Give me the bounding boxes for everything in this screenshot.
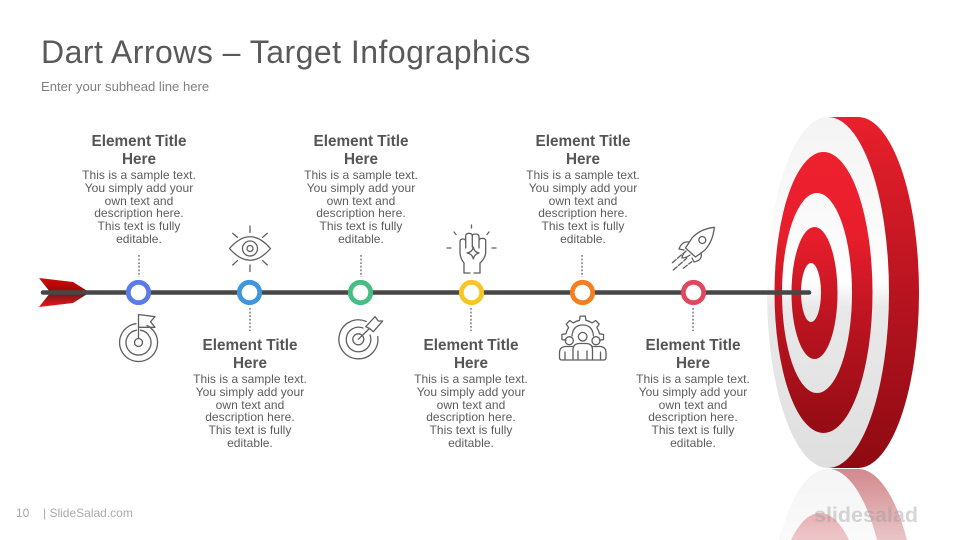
text block 4: Here	[454, 355, 488, 372]
text block 1: This is a sample text.	[82, 168, 196, 182]
footer brand: | SlideSalad.com	[43, 506, 133, 520]
text block 1: Element Title	[92, 133, 186, 150]
text block 4: editable.	[448, 436, 494, 450]
text block 6	[636, 337, 750, 450]
text block 4: This is a sample text.	[414, 372, 528, 386]
text block 6: You simply add your	[639, 385, 747, 399]
text block 2: This is a sample text.	[193, 372, 307, 386]
target	[767, 117, 919, 468]
text block 4: You simply add your	[417, 385, 525, 399]
text block 1: Here	[122, 151, 156, 168]
subhead: Enter your subhead line here	[41, 79, 209, 94]
text block 3: editable.	[338, 232, 384, 246]
text block 5: Here	[566, 151, 600, 168]
text block 2: Here	[233, 355, 267, 372]
text block 6: description here.	[648, 410, 738, 424]
text block 5: editable.	[560, 232, 606, 246]
text block 1: This text is fully	[98, 219, 180, 233]
text block 3: Here	[344, 151, 378, 168]
text block 1: editable.	[116, 232, 162, 246]
text block 2: This text is fully	[209, 423, 291, 437]
text block 5: description here.	[538, 206, 628, 220]
text block 6: own text and	[659, 398, 727, 412]
text block 1	[82, 133, 196, 246]
text block 1: own text and	[105, 194, 173, 208]
timeline marker 5	[572, 282, 593, 303]
text block 4: Element Title	[424, 337, 518, 354]
text block 3: own text and	[327, 194, 395, 208]
timeline marker 4	[461, 282, 482, 303]
timeline marker 1	[128, 282, 149, 303]
text block 2: Element Title	[203, 337, 297, 354]
text block 3: description here.	[316, 206, 406, 220]
text block 6: This text is fully	[652, 423, 734, 437]
text block 2: You simply add your	[196, 385, 304, 399]
text block 4	[414, 337, 528, 450]
text block 5: This text is fully	[542, 219, 624, 233]
text block 5	[526, 133, 640, 246]
text block 4: description here.	[426, 410, 516, 424]
text block 2: own text and	[216, 398, 284, 412]
icon: team with gear	[560, 316, 606, 360]
icon: flag target	[120, 314, 158, 362]
dotted connectors	[139, 255, 693, 331]
text block 6: This is a sample text.	[636, 372, 750, 386]
text block 4: own text and	[437, 398, 505, 412]
text block 5: You simply add your	[529, 181, 637, 195]
icon: raised fist	[447, 225, 496, 273]
text block 3	[304, 133, 418, 246]
text block 2	[193, 337, 307, 450]
icon: target with dart	[339, 317, 383, 359]
page number: 10	[16, 506, 29, 520]
text block 4: This text is fully	[430, 423, 512, 437]
text block 5: own text and	[549, 194, 617, 208]
text block 6: editable.	[670, 436, 716, 450]
text block 5: This is a sample text.	[526, 168, 640, 182]
title: Dart Arrows – Target Infographics	[41, 34, 531, 70]
icon: eye	[230, 226, 270, 272]
text block 2: editable.	[227, 436, 273, 450]
arrow fletching	[39, 278, 89, 307]
text block 1: description here.	[94, 206, 184, 220]
text block 3: This text is fully	[320, 219, 402, 233]
timeline marker 6	[683, 282, 704, 303]
timeline marker 3	[350, 282, 371, 303]
icon: rocket	[672, 227, 714, 270]
text block 1: You simply add your	[85, 181, 193, 195]
text block 6: Here	[676, 355, 710, 372]
text block 6: Element Title	[646, 337, 740, 354]
text block 3: This is a sample text.	[304, 168, 418, 182]
text block 5: Element Title	[536, 133, 630, 150]
text block 2: description here.	[205, 410, 295, 424]
text block 3: You simply add your	[307, 181, 415, 195]
target reflection	[779, 469, 907, 540]
watermark: slidesalad	[814, 503, 918, 527]
arrow shaft	[43, 290, 809, 295]
timeline graphics	[39, 117, 919, 540]
text block 3: Element Title	[314, 133, 408, 150]
timeline marker 2	[239, 282, 260, 303]
